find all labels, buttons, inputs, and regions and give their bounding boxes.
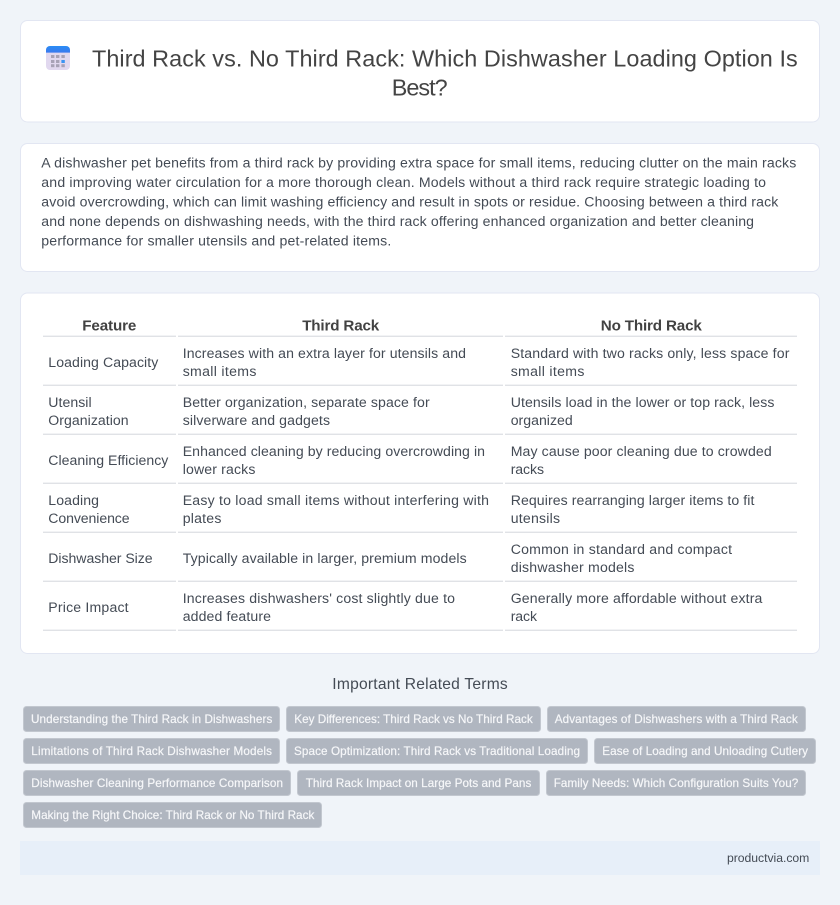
- tag: Making the Right Choice: Third Rack or No Third Rack: [31, 809, 314, 822]
- panel: comparison table: [20, 293, 820, 654]
- table row: dishwasher size: dishwasher models: [511, 559, 634, 575]
- table row: cleaning efficiency: [48, 443, 772, 477]
- table row: cleaning efficiency: May cause poor cleaning due to crowded: [511, 443, 772, 459]
- tag: [548, 706, 806, 732]
- icon: calendar grid: [46, 46, 70, 70]
- table row: loading convenience: utensils: [511, 510, 560, 526]
- footer source text: productvia.com: [727, 851, 809, 865]
- tag: Dishwasher Cleaning Performance Comparison: [31, 777, 283, 790]
- footer: [20, 841, 820, 875]
- tag: [594, 738, 816, 764]
- table row: loading capacity: [48, 345, 790, 379]
- table row: loading capacity: small items: [183, 363, 256, 379]
- title: Best?: [392, 75, 448, 101]
- table row: dishwasher size: [48, 541, 732, 575]
- text block: introduction: and none depends on dishwashing needs, with the third rack offering enhanced organization and better cleaning: [41, 213, 754, 229]
- table row: loading capacity: Standard with two racks only, less space for: [511, 345, 790, 361]
- table row: cleaning efficiency: Cleaning Efficiency: [48, 452, 169, 468]
- table row: price impact: Price Impact: [48, 599, 129, 615]
- table row: loading convenience: Convenience: [48, 510, 130, 526]
- table header row: [82, 318, 702, 334]
- table row: utensil organization: silverware and gadgets: [183, 412, 330, 428]
- table row: loading convenience: plates: [183, 510, 221, 526]
- tag: [24, 738, 280, 764]
- tag: Ease of Loading and Unloading Cutlery: [602, 745, 808, 758]
- table row: cleaning efficiency: Enhanced cleaning by reducing overcrowding in: [183, 443, 485, 459]
- tag: [24, 770, 290, 796]
- table row: loading convenience: Requires rearranging larger items to fit: [511, 492, 754, 508]
- title: [92, 46, 798, 101]
- table row: price impact: added feature: [183, 608, 271, 624]
- title: Third Rack vs. No Third Rack: Which Dishwasher Loading Option Is: [92, 46, 798, 72]
- table row: price impact: Increases dishwashers' cost slightly due to: [183, 590, 455, 606]
- text block: introduction: performance for smaller utensils and pet-related items.: [41, 233, 391, 249]
- table row: dishwasher size: Typically available in larger, premium models: [183, 550, 467, 566]
- tag: Third Rack Impact on Large Pots and Pans: [306, 777, 531, 790]
- table row: dishwasher size: Common in standard and compact: [511, 541, 732, 557]
- table row: utensil organization: organized: [511, 412, 573, 428]
- tag: [24, 706, 280, 732]
- table row: loading convenience: Easy to load small items without interfering with: [183, 492, 489, 508]
- tag: Key Differences: Third Rack vs No Third Rack: [294, 713, 533, 726]
- table row: utensil organization: [48, 394, 774, 428]
- table row: dishwasher size: Dishwasher Size: [48, 550, 153, 566]
- table row: utensil organization: Utensils load in the lower or top rack, less: [511, 394, 774, 410]
- table row: price impact: Generally more affordable without extra: [511, 590, 763, 606]
- table row: loading capacity: Increases with an extra layer for utensils and: [183, 345, 466, 361]
- table header row: Third Rack: [302, 318, 380, 334]
- panel: title card: [20, 20, 820, 122]
- tag: Family Needs: Which Configuration Suits You?: [554, 777, 799, 790]
- tag: [286, 738, 588, 764]
- table row: loading capacity: small items: [511, 363, 584, 379]
- tag: Understanding the Third Rack in Dishwashers: [31, 713, 272, 726]
- text block: introduction: and improving water circulation for a more thorough clean. Models without a third rack require strategic loading to: [41, 174, 766, 190]
- table header row: No Third Rack: [601, 318, 702, 334]
- tag: [298, 770, 540, 796]
- table row: loading convenience: Loading: [48, 492, 99, 508]
- text block: introduction: A dishwasher pet benefits from a third rack by providing extra space for small items, reducing clutter on the main racks: [41, 155, 796, 171]
- table row: utensil organization: Utensil: [48, 394, 92, 410]
- table row: loading convenience: [48, 492, 754, 526]
- tag: Advantages of Dishwashers with a Third Rack: [555, 713, 798, 726]
- table row: loading capacity: Loading Capacity: [48, 354, 159, 370]
- table row: utensil organization: Organization: [48, 412, 129, 428]
- table row: utensil organization: Better organization, separate space for: [183, 394, 430, 410]
- tag: [546, 770, 806, 796]
- tag: [286, 706, 540, 732]
- panel: introduction text: [20, 144, 820, 272]
- tag: Space Optimization: Third Rack vs Traditional Loading: [294, 745, 580, 758]
- tag: [24, 802, 322, 828]
- heading: important related terms: Important Related Terms: [332, 676, 508, 693]
- table row: cleaning efficiency: lower racks: [183, 461, 255, 477]
- panel: related term tags: [24, 706, 816, 828]
- table row: price impact: [48, 590, 763, 624]
- text block: introduction: [41, 155, 796, 249]
- table header row: Feature: [82, 318, 136, 334]
- table row: cleaning efficiency: racks: [511, 461, 544, 477]
- tag: Limitations of Third Rack Dishwasher Models: [31, 745, 272, 758]
- table row: price impact: rack: [511, 608, 538, 624]
- text block: introduction: avoid overcrowding, which can limit washing efficiency and result in spots or residue. Choosing between a third rack: [41, 194, 779, 210]
